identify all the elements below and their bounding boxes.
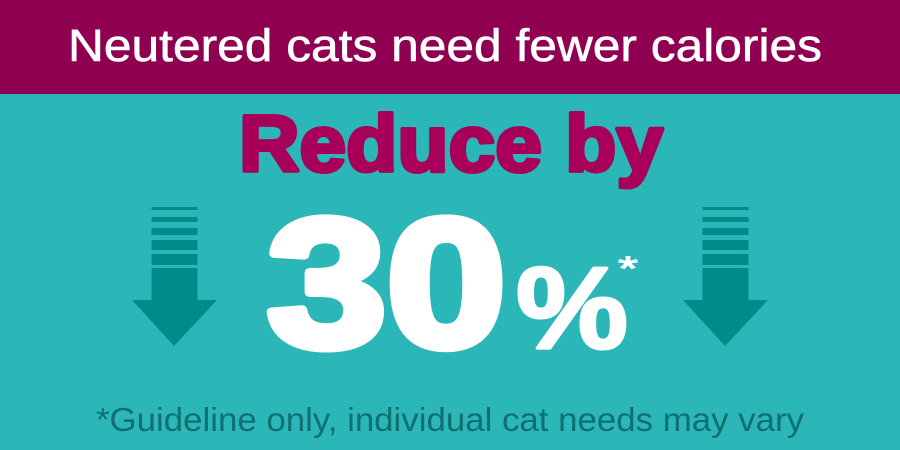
footnote: *Guideline only, individual cat needs may vary [96, 401, 805, 438]
big number: 30: 30 [267, 181, 506, 385]
percent sign: % [516, 243, 628, 373]
heading: reduce by: Reduce by [239, 99, 664, 188]
title: Neutered cats need fewer calories [68, 20, 822, 71]
asterisk: * [618, 250, 638, 288]
icon: left down arrow [132, 207, 217, 346]
icon: right down arrow [683, 207, 768, 346]
header band [0, 0, 900, 94]
